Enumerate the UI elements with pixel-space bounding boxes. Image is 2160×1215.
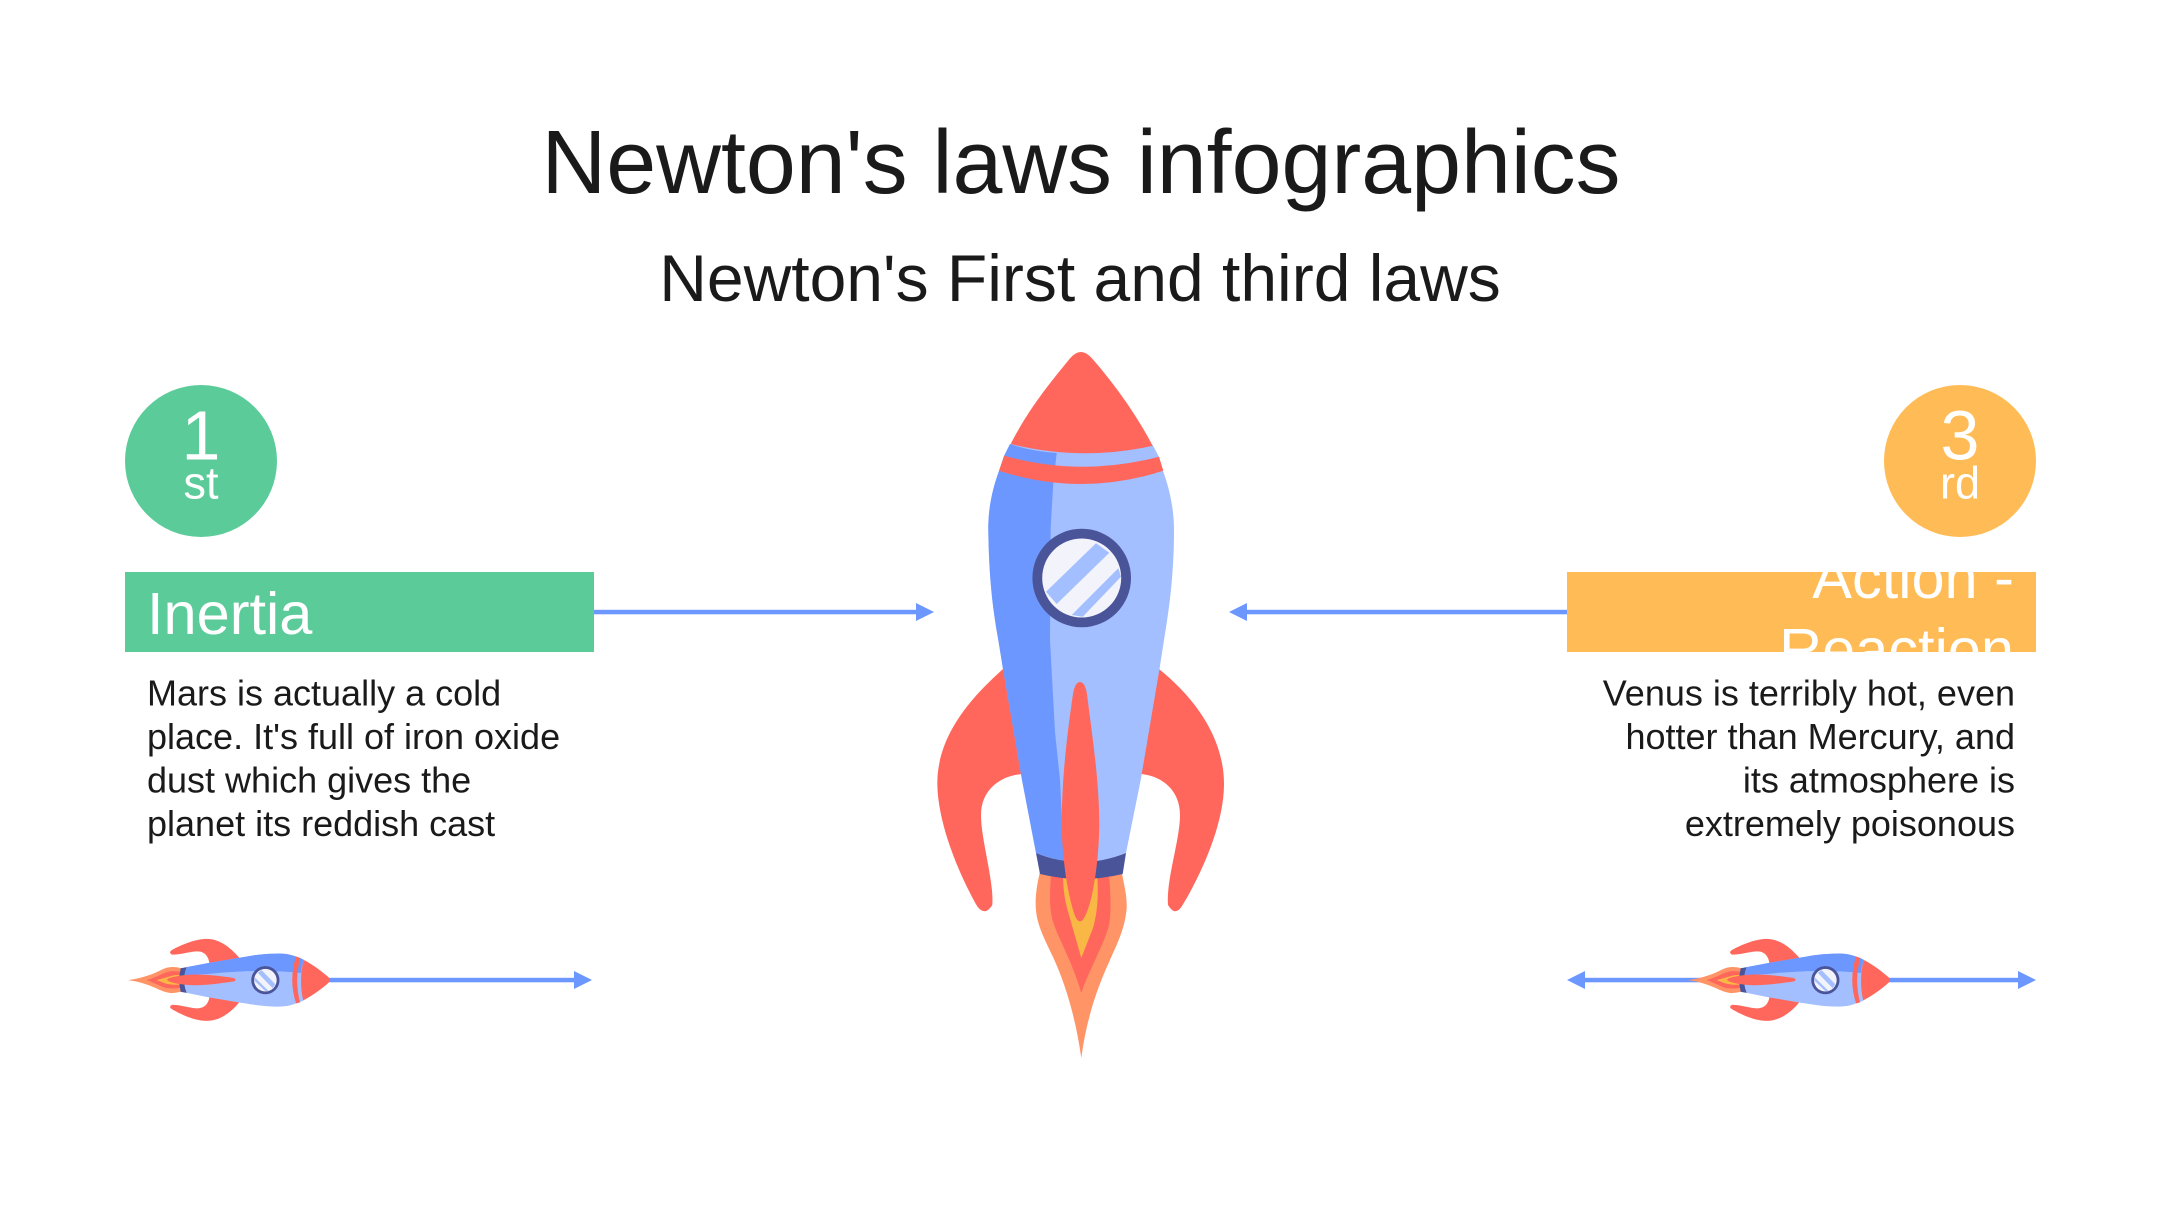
diagram: first law small rocket with forward arrow	[128, 939, 592, 1021]
badge: 3rd: rd	[1940, 458, 1980, 508]
panel: first law	[125, 385, 594, 844]
text block: third law description: extremely poisonous	[1685, 803, 2015, 844]
text block: first law description: dust which gives the	[147, 760, 471, 800]
badge: 1st: 1	[182, 396, 220, 474]
panel: third law	[1567, 385, 2036, 844]
icon: central rocket	[937, 352, 1224, 1058]
subtitle: Newton's First and third laws	[659, 241, 1501, 315]
icon: small rocket	[128, 939, 330, 1021]
text block: first law description: Mars is actually a cold	[147, 672, 501, 714]
badge: 3rd: 3	[1941, 396, 1979, 474]
heading bar: Inertia	[125, 572, 594, 652]
text block: first law description: place. It's full of iron oxide	[147, 716, 560, 757]
arrow: reaction backward	[1567, 971, 1702, 989]
arrow: action-reaction to rocket	[1229, 603, 1567, 621]
text block: first law description	[147, 672, 560, 844]
heading bar: Action - Reaction: Action -	[1812, 544, 2014, 611]
badge: 1st	[125, 385, 277, 537]
badge: 3rd	[1884, 385, 2036, 537]
arrow: action forward	[1888, 971, 2036, 989]
heading bar: Action - Reaction: Reaction	[1779, 616, 2014, 683]
heading bar: Inertia: Inertia	[147, 580, 313, 647]
badge: 1st: st	[183, 458, 219, 508]
title: Newton's laws infographics	[542, 113, 1620, 213]
heading bar: Action - Reaction	[1567, 572, 2036, 652]
arrow: forward motion	[328, 971, 592, 989]
text block: third law description: its atmosphere is	[1743, 760, 2015, 800]
text block: third law description: hotter than Mercury, and	[1625, 716, 2015, 757]
text block: third law description: Venus is terribly hot, even	[1603, 672, 2015, 714]
diagram: third law small rocket with opposing arrows	[1567, 939, 2036, 1021]
icon: small rocket	[1688, 939, 1890, 1021]
arrow: inertia to rocket	[594, 603, 934, 621]
text block: first law description: planet its reddish cast	[147, 803, 495, 844]
text block: third law description	[1603, 672, 2015, 844]
